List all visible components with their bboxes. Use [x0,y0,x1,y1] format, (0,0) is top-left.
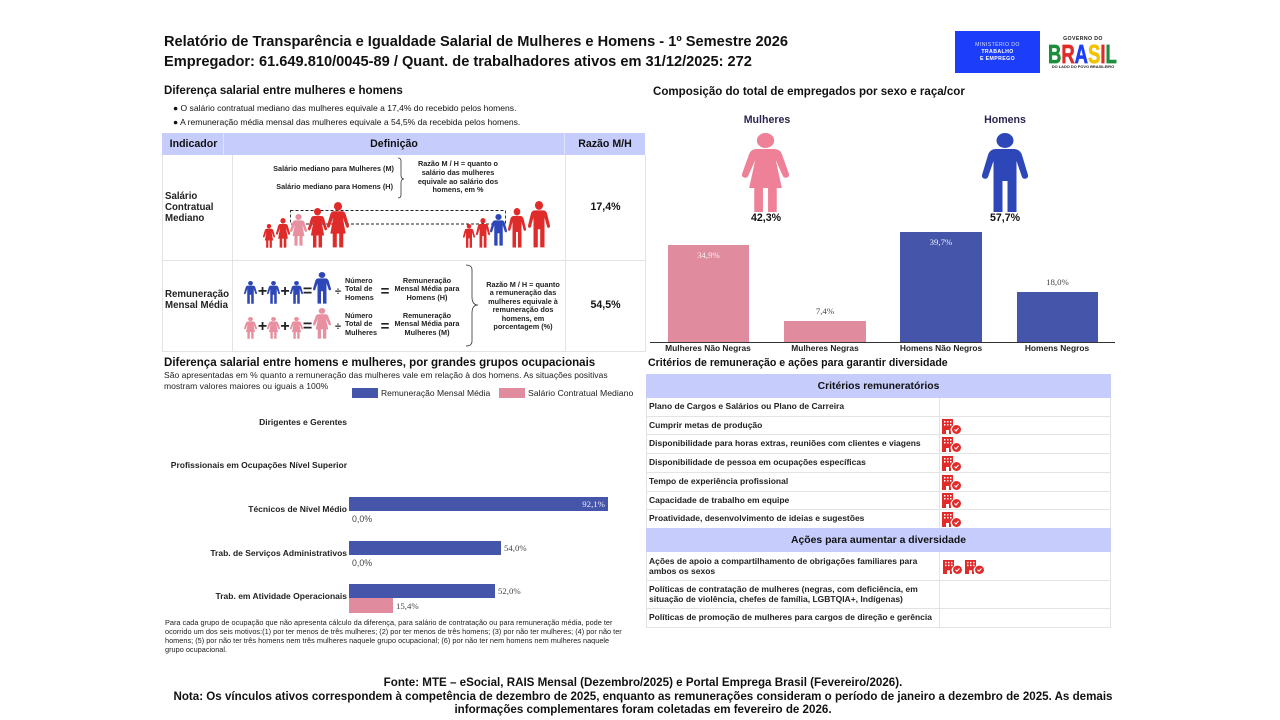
value: 15,4%: 15,4% [396,601,419,611]
operators: = [381,318,390,335]
label: mulheres: Mulheres [744,114,790,126]
row label: salário contratual mediano: Salário [165,191,197,202]
text: remuneração mulheres: Remuneração [403,311,451,320]
row: ocupações: Disponibilidade de pessoa em ocupações específicas [649,457,866,467]
row label: salário contratual mediano: Mediano [165,213,204,224]
value: 34,9%: 34,9% [697,250,720,260]
header: critérios remuneratórios: Critérios remuneratórios [818,381,939,392]
text: razão salário: salário das mulheres [422,168,494,177]
note: informações complementares foram coletadas em fevereiro de 2026. [454,704,832,716]
text: remuneração homens: Mensal Média para [395,284,459,293]
legend: Remuneração Mensal Média [381,388,490,398]
text: razão remuneração: remuneração dos [493,305,553,314]
axis labels: Mulheres Não Negras [665,343,751,353]
logo: governo do Brasil: DO LADO DO POVO BRASILEIRO [1052,64,1114,69]
bar chart: composition: Homens Não Negros [900,343,982,353]
text: razão salário [418,159,498,194]
value: 57,7%: 57,7% [990,212,1020,224]
value: 54,5%: 54,5% [590,299,621,311]
heading: salary difference: Diferença salarial entre mulheres e homens [164,85,403,97]
group label: dirigentes: Dirigentes e Gerentes [259,417,347,427]
logo: ministry: E EMPREGO [980,56,1015,62]
value: 92,1%: 92,1% [582,499,605,509]
text: remuneração homens: Homens (H) [407,293,447,302]
women sum equation [244,308,331,339]
footnote: occupational groups: Para cada grupo de ocupação que não apresenta cálculo da diferença, para salário de contratação ou para remuneração média, pode ter [165,618,612,627]
header: indicador: Indicador [170,138,217,150]
value: 39,7%: 39,7% [930,237,952,247]
bullet: average pay: ● A remuneração média mensal das mulheres equivale a 54,5% da recebida pelos homens. [173,117,520,127]
text: número total de homens: Homens [345,293,374,302]
row: apoio [649,556,918,576]
logo: ministry: TRABALHO [981,49,1014,55]
value: serviços 0,0%: 0,0% [352,558,372,568]
men sum equation [244,272,331,304]
text: razão remuneração: Razão M / H = quanto [486,280,560,289]
row: apoio: Ações de apoio a compartilhamento de obrigações familiares para [649,556,917,566]
row label: remuneração mensal média [165,289,229,311]
legend: remuneração [352,388,378,398]
bar chart: composition: Homens Negros [1025,343,1089,353]
logo: ministry [955,31,1040,73]
text: razão remuneração: porcentagem (%) [493,322,553,331]
row: equipe: Capacidade de trabalho em equipe [649,495,789,505]
median dashed box [290,210,506,224]
label: homens: Homens [984,114,1026,126]
row: experiência: Tempo de experiência profissional [649,476,788,486]
employer line: Empregador: 61.649.810/0045-89 / Quant. de trabalhadores ativos em 31/12/2025: 272 [164,54,752,70]
value: 54,0%: 54,0% [504,543,527,553]
bar: serviços remuneração [349,541,501,555]
value: 17,4%: 17,4% [590,201,621,213]
operators: + [258,283,267,300]
text: número total de homens: Total de [345,284,372,293]
bar: operacionais remuneração [349,584,495,598]
panel: criteria table [646,374,1111,628]
axis [650,342,1115,343]
table header [162,133,645,155]
bar: mulheres não negras [668,245,749,343]
text: razão remuneração: homens, em [502,314,544,323]
row: apoio: ambos os sexos [649,566,715,576]
text: remuneração mulheres: Mulheres (M) [404,328,450,337]
row: contratação: situação de violência, chefes de família, LGBTQIA+, Indígenas) [649,594,903,604]
men group [463,201,550,248]
heading: criteria: Critérios de remuneração e ações para garantir diversidade [648,357,948,369]
text: occupational intro: mostram valores maiores ou iguais a 100% [164,380,328,390]
value: 18,0%: 18,0% [1046,277,1069,287]
group label: profissionais: Profissionais em Ocupações Nível Superior [171,460,347,470]
bar chart: composition: Mulheres Negras [791,343,859,353]
row: metas: Cumprir metas de produção [649,420,762,430]
operators: ÷ [335,321,341,333]
operators: + [280,283,290,300]
text: salário mediano homens: Salário mediano para Homens (H) [276,182,393,191]
text: número total de mulheres: Número [345,311,373,320]
title: Relatório de Transparência e Igualdade Salarial de Mulheres e Homens - 1º Semestre 2026 [164,34,788,50]
operators: ÷ [335,286,341,298]
row: proatividade: Proatividade, desenvolvimento de ideias e sugestões [649,513,864,523]
text: remuneração mulheres: Mensal Média para [395,319,459,328]
text: occupational intro: São apresentadas em % quanto a remuneração das mulheres vale em relação à dos homens. As situações positivas [164,370,608,380]
legend: salário [499,388,525,398]
header: ações [646,528,1111,552]
heading: occupational groups: Diferença salarial entre homens e mulheres, por grandes grupos ocupacionais [164,357,595,369]
note [174,690,1112,716]
row label: salário contratual mediano: Contratual [165,202,213,213]
bar: homens não negros [900,232,982,343]
source: Fonte: MTE – eSocial, RAIS Mensal (Dezembro/2025) e Portal Emprega Brasil (Fevereiro/2026). [384,676,902,689]
logo: governo do Brasil: GOVERNO DO [1063,36,1103,42]
operators: = [303,283,312,300]
text: número total de homens [345,276,374,302]
row: horas extras: Disponibilidade para horas extras, reuniões com clientes e viagens [649,438,921,448]
group label: técnicos: Técnicos de Nível Médio [248,504,347,514]
text: número total de mulheres: Mulheres [345,328,377,337]
bar: mulheres negras [784,321,866,343]
text: razão salário: homens, em % [432,185,484,194]
icon: man [982,133,1028,212]
panel: indicators table [162,133,646,352]
text: razão salário: Razão M / H = quanto o [418,159,498,168]
footnote: occupational groups [165,618,622,654]
value: 52,0%: 52,0% [498,586,521,596]
text: número total de homens: Número [345,276,373,285]
icon: woman [742,133,789,212]
logo: governo do Brasil: BRASIL [1048,39,1117,69]
value: 7,4%: 7,4% [816,306,834,316]
footnote: occupational groups: grupo ocupacional. [165,645,227,654]
header: definição: Definição [370,138,418,150]
text: razão salário: equivale ao salário dos [418,177,498,186]
bar: homens negros [1017,292,1098,343]
footnote: occupational groups: ocorrido um dos seis motivos:(1) por ter menos de três mulheres; (2) por ter menos de três homens; (3) por não ter mulheres; (4) por não ter [165,627,622,636]
brace: salário [398,158,404,198]
note: Nota: Os vínculos ativos correspondem à competência de dezembro de 2025, enquanto as remunerações consideram o período de janeiro a dezembro de 2025. As demais [174,691,1112,703]
bar chart: occupational groups [171,417,608,613]
value: 42,3%: 42,3% [751,212,781,224]
group label: operacionais: Trab. em Atividade Operacionais [216,591,347,601]
brace: remuneração [466,265,478,346]
operators: + [280,318,290,335]
row label: remuneração mensal média: Mensal Média [165,300,228,311]
header: definição [223,133,565,155]
bar: operacionais salário [349,598,393,613]
text: número total de mulheres [345,311,377,337]
text: número total de mulheres: Total de [345,319,372,328]
row label: salário contratual mediano [165,191,213,224]
row label: remuneração mensal média: Remuneração [165,289,229,300]
heading: composition: Composição do total de empregados por sexo e raça/cor [653,86,965,98]
operators: + [258,318,267,335]
operators [258,283,390,335]
row: plano de cargos: Plano de Cargos e Salários ou Plano de Carreira [649,401,844,411]
logo: ministry: MINISTÉRIO DO [975,42,1020,48]
footnote: occupational groups: homens; (5) por não ter três homens nem três mulheres naquele grupo ocupacional; (6) por não ter nem homens nem mulheres naquele [165,636,609,645]
value: técnicos 0,0%: 0,0% [352,514,372,524]
bullet: contractual salary: ● O salário contratual mediano das mulheres equivale a 17,4% do recebido pelos homens. [173,103,516,113]
row: promoção: Políticas de promoção de mulheres para cargos de direção e gerência [649,612,932,622]
women group [263,202,349,248]
row: contratação: Políticas de contratação de mulheres (negras, com deficiência, em [649,584,918,594]
header: razão: Razão M/H [578,138,632,150]
text: remuneração homens: Remuneração [403,276,451,285]
operators: = [381,283,390,300]
text: razão remuneração: mulheres equivale à [488,297,558,306]
row: contratação [649,584,918,604]
header: ações: Ações para aumentar a diversidade [791,535,966,546]
text: remuneração homens [395,276,460,302]
text: razão remuneração: a remuneração das [490,288,556,297]
text: razão remuneração [486,280,560,331]
text: salário mediano mulheres: Salário mediano para Mulheres (M) [273,164,394,173]
header: critérios remuneratórios [646,374,1111,398]
text: remuneração mulheres [395,311,460,337]
legend: Salário Contratual Mediano [528,388,633,398]
bar: técnicos remuneração [349,497,608,511]
operators: = [303,318,312,335]
text: occupational intro [164,370,608,390]
bar chart: composition [650,232,1115,353]
legend [352,388,633,398]
group label: serviços: Trab. de Serviços Administrativos [210,548,347,558]
